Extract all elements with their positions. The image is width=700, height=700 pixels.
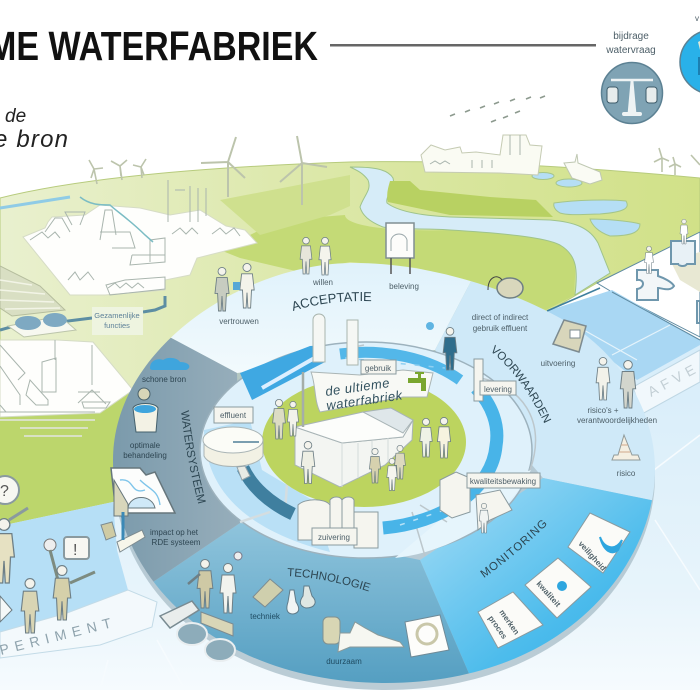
label: kwaliteitsbewaking: kwaliteitsbewaking bbox=[470, 477, 536, 486]
person: pointing with exclamation bbox=[44, 537, 95, 620]
banner: de ultieme waterfabriek: de ultieme bbox=[324, 375, 391, 399]
text: voorwaarden: VOORWAARDEN bbox=[492, 344, 552, 423]
birds bbox=[450, 96, 545, 122]
handwritten subtitle bbox=[0, 106, 68, 153]
people: vertrouwen bbox=[215, 263, 259, 326]
icon: direct of indirect gebruik: direct of indirect bbox=[472, 313, 529, 322]
people: risico's: risico's + bbox=[587, 406, 619, 415]
people: risico's bbox=[577, 357, 657, 425]
kwaliteit unit bbox=[440, 472, 512, 533]
person: blue bbox=[426, 322, 457, 370]
label: levering: levering bbox=[484, 385, 512, 394]
person: question bbox=[0, 476, 28, 583]
heading path: watersysteem bbox=[181, 411, 201, 514]
label: gezamenlijke functies bbox=[92, 307, 143, 335]
person: woman bbox=[21, 579, 39, 633]
paper: veiligheid bbox=[568, 513, 630, 573]
diamond sign bbox=[0, 596, 12, 622]
band: experiment: PERIMENT bbox=[0, 613, 118, 658]
wind turbines bbox=[89, 136, 700, 205]
icon: cone risico bbox=[612, 435, 640, 478]
building: waterfabriek bbox=[295, 408, 413, 487]
pipeline bbox=[0, 296, 165, 330]
land bbox=[0, 162, 700, 526]
band: afvegen bbox=[633, 350, 700, 414]
paper: kwaliteit: kwaliteit bbox=[535, 579, 563, 609]
industry plant bbox=[0, 180, 257, 295]
meadow by river bbox=[387, 181, 553, 217]
icon: book uitvoering: uitvoering bbox=[541, 359, 575, 368]
cloud: schone bron bbox=[142, 358, 189, 384]
icon: scales, bijdrage watervraag: bijdrage bbox=[613, 31, 649, 42]
label: gebruik bbox=[361, 360, 396, 374]
text: acceptatie: ACCEPTATIE bbox=[293, 292, 372, 311]
ring: outer disc sectors bbox=[113, 263, 655, 683]
green meadow left bbox=[0, 345, 165, 526]
person: question: ? bbox=[0, 483, 9, 500]
heading path: voorwaarden bbox=[490, 351, 550, 436]
people: risico's: verantwoordelijkheden bbox=[577, 416, 657, 425]
paper: proces bbox=[478, 592, 543, 648]
icon: techniek tablet bbox=[250, 579, 283, 621]
round settling tanks bbox=[8, 313, 76, 337]
text: technologie: TECHNOLOGIE bbox=[288, 568, 371, 592]
person on puzzle right bbox=[680, 219, 688, 244]
icon: duurzaam materials bbox=[323, 617, 404, 666]
green core bbox=[262, 377, 466, 507]
label: zuivering: zuivering bbox=[318, 533, 350, 542]
puzzle piece 2 bbox=[671, 241, 695, 266]
paper: proces: proces bbox=[486, 614, 509, 641]
flag pole bbox=[302, 372, 304, 427]
person: pointing with exclamation: ! bbox=[73, 542, 77, 559]
zuivering tanks bbox=[298, 497, 378, 548]
label: effluent: effluent bbox=[220, 411, 247, 420]
heading path: technologie bbox=[287, 576, 376, 594]
icon: scales, bijdrage watervraag: watervraag bbox=[605, 45, 656, 56]
text: watersysteem: WATERSYSTEEM bbox=[181, 410, 206, 504]
people: willen bbox=[300, 237, 333, 287]
label: gebruik: gebruik bbox=[365, 364, 392, 373]
icon: green tap bbox=[408, 372, 426, 391]
panel: blue afvegen field bbox=[547, 288, 700, 380]
band: experiment bbox=[0, 590, 157, 658]
label: impact op het RDE systeem bbox=[150, 528, 201, 547]
banner: de ultieme waterfabriek: waterfabriek bbox=[325, 387, 404, 413]
people: willen: willen bbox=[312, 278, 333, 287]
icon: bucket optimale behandeling: behandeling bbox=[123, 451, 167, 460]
text: monitoring: MONITORING bbox=[480, 520, 546, 578]
ring shadow bbox=[113, 270, 655, 690]
icon: cone risico: risico bbox=[617, 469, 636, 478]
paper: veiligheid: veiligheid bbox=[577, 539, 608, 573]
filter beds bbox=[0, 266, 65, 316]
icon: book uitvoering bbox=[541, 320, 586, 368]
river bbox=[350, 167, 610, 295]
distant building bbox=[564, 154, 602, 184]
distant factory bbox=[421, 135, 542, 175]
icon: techniek tablet: techniek bbox=[250, 612, 281, 621]
heading path: monitoring bbox=[484, 518, 554, 578]
icon: bucket optimale behandeling: optimale bbox=[130, 441, 161, 450]
label: levering bbox=[480, 381, 516, 395]
paper: kwaliteit bbox=[525, 558, 591, 618]
panel: experiment field bbox=[0, 502, 128, 632]
label: gezamenlijke functies: Gezamenlijke bbox=[94, 311, 140, 320]
water ring bbox=[240, 345, 497, 528]
people: vertrouwen: vertrouwen bbox=[219, 317, 259, 326]
green meadow centre hills bbox=[220, 175, 350, 235]
cloud: schone bron: schone bron bbox=[142, 375, 186, 384]
label: effluent bbox=[214, 407, 253, 423]
sector: watersysteem bbox=[113, 338, 240, 582]
title rule bbox=[330, 44, 596, 46]
puzzle piece 1 bbox=[637, 270, 674, 300]
central people bbox=[273, 399, 451, 490]
icon: duurzaam materials: duurzaam bbox=[326, 657, 362, 666]
decorative lines in water bbox=[100, 435, 700, 690]
icon: map watersysteem bbox=[111, 468, 175, 516]
heading path: acceptatie bbox=[293, 301, 384, 311]
icon: bucket optimale behandeling bbox=[123, 388, 167, 460]
label: zuivering bbox=[312, 528, 357, 545]
label: impact op het RDE systeem: RDE systeem bbox=[152, 538, 201, 547]
handwritten subtitle: de bbox=[5, 106, 26, 127]
sector: acceptatie bbox=[171, 263, 471, 373]
effluent tank bbox=[203, 427, 263, 480]
icon: scales, bijdrage watervraag bbox=[602, 31, 662, 124]
levering tower bbox=[474, 359, 483, 401]
banner: de ultieme waterfabriek bbox=[311, 370, 433, 413]
icon: blue globe bbox=[680, 14, 700, 94]
puzzle piece 3 bbox=[697, 301, 700, 323]
green meadow lower middle bbox=[220, 215, 575, 310]
ponds bbox=[532, 172, 640, 236]
basins bbox=[160, 601, 235, 661]
panel: white puzzle zone afvegen bbox=[597, 219, 700, 337]
icon: flasks bbox=[287, 586, 315, 614]
person on puzzle left bbox=[645, 246, 653, 274]
sign: beleving bbox=[386, 223, 419, 291]
sign: beleving: beleving bbox=[389, 282, 419, 291]
label: gezamenlijke functies: functies bbox=[104, 321, 130, 330]
icon: rolled plan bbox=[101, 512, 145, 552]
label: impact op het RDE systeem: impact op het bbox=[150, 528, 199, 537]
sector: monitoring bbox=[420, 478, 652, 674]
inner disc bbox=[200, 342, 536, 558]
icon: direct of indirect gebruik: gebruik effluent bbox=[473, 324, 528, 333]
sea bbox=[0, 290, 700, 690]
icon: direct of indirect gebruik bbox=[472, 277, 529, 333]
paper: spiral bbox=[405, 615, 449, 657]
sector: voorwaarden bbox=[435, 281, 655, 500]
people: technologie bbox=[188, 552, 242, 613]
icon: blue globe: v bbox=[695, 14, 699, 23]
sector: technologie bbox=[154, 523, 469, 683]
white plot with tanks bbox=[0, 340, 133, 436]
paper: proces: merken bbox=[497, 608, 521, 637]
gebruik stand bbox=[313, 314, 358, 365]
label: kwaliteitsbewaking bbox=[467, 473, 540, 488]
